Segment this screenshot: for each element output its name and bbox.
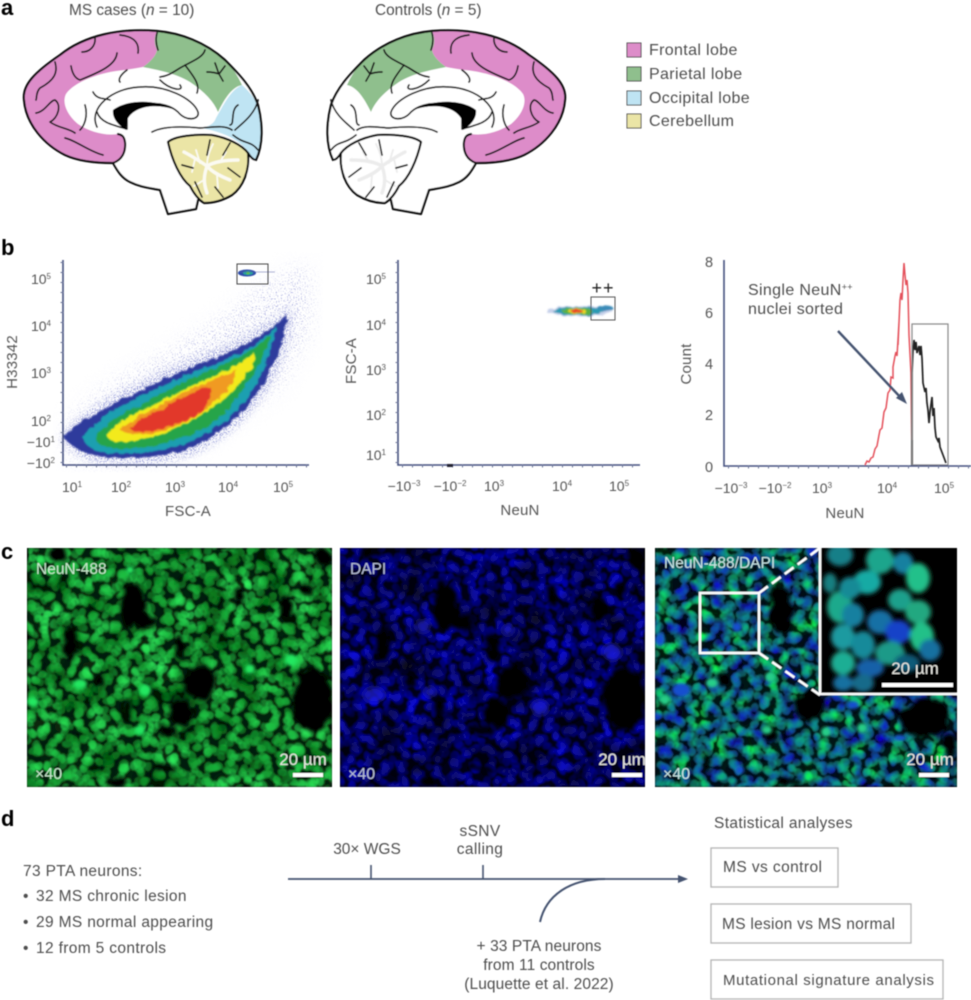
y tick labels: 4 xyxy=(705,357,713,373)
corpus callosum xyxy=(391,87,494,129)
image background xyxy=(27,548,332,787)
x tick labels: 10 xyxy=(812,480,828,496)
scale bar xyxy=(293,773,323,777)
y tick labels: 5 xyxy=(382,272,387,281)
zoom region box xyxy=(700,593,759,653)
sample list: • xyxy=(23,940,29,957)
x axis title: FSC-A xyxy=(165,503,211,520)
analysis box: mutational signature: Mutational signature analysis xyxy=(723,972,934,989)
annotation text: Single NeuN xyxy=(748,282,842,299)
y tick labels: 4 xyxy=(382,318,387,327)
analysis box: MS vs control xyxy=(711,848,838,887)
y tick labels: 10 xyxy=(366,362,382,378)
inset xyxy=(820,544,957,695)
x tick labels xyxy=(388,478,630,494)
brain silhouette xyxy=(328,30,565,214)
tick: calling xyxy=(482,865,484,879)
scale label: 20 µm xyxy=(906,750,954,769)
density: yellow xyxy=(107,353,255,442)
arrow to gate xyxy=(838,331,907,404)
sample list: • xyxy=(23,888,29,905)
green nuclei xyxy=(660,672,867,737)
brain diagram: MS cases xyxy=(24,30,262,214)
density: teal xyxy=(82,326,277,454)
image background xyxy=(340,548,645,787)
x tick labels xyxy=(715,480,955,496)
y tick labels: −10 xyxy=(27,434,51,450)
analysis box: MS vs control: MS vs control xyxy=(723,859,822,876)
y tick labels: 2 xyxy=(382,408,387,417)
red histogram xyxy=(865,263,912,465)
x tick labels: 10 xyxy=(609,478,625,494)
x tick labels: −10 xyxy=(434,478,457,494)
brain silhouette xyxy=(24,30,261,214)
heading: controls: Controls (n = 5) xyxy=(375,2,482,19)
x tick labels: 4 xyxy=(568,479,573,488)
dense scatter fringe xyxy=(60,305,292,464)
y tick labels: 6 xyxy=(705,306,713,322)
x tick labels: 1 xyxy=(78,480,83,489)
micrograph: NeuN-488 xyxy=(27,547,332,787)
scale label: 20 µm xyxy=(598,750,646,769)
x tick labels: 2 xyxy=(127,480,132,489)
y tick labels: 10 xyxy=(31,271,47,287)
y tick labels: 4 xyxy=(47,319,52,328)
cerebellum white matter xyxy=(351,144,405,193)
y axis title: FSC-A xyxy=(343,338,360,384)
gate box xyxy=(591,297,615,320)
y tick labels: 0 xyxy=(705,460,713,476)
sample list: 32 MS chronic lesion xyxy=(36,888,187,905)
panel label b: b xyxy=(1,235,14,260)
x tick labels: −10 xyxy=(388,478,411,494)
y tick labels: −10 xyxy=(27,455,51,471)
density: blue xyxy=(63,315,287,458)
legend item: parietal lobe: Parietal lobe xyxy=(649,66,742,83)
y tick labels xyxy=(27,271,56,471)
x tick labels xyxy=(62,479,294,495)
sulci xyxy=(36,33,258,197)
gate box xyxy=(912,324,948,465)
y tick labels: 10 xyxy=(31,413,47,429)
x tick labels: −10 xyxy=(715,480,738,496)
analysis box: mutational signature xyxy=(711,960,943,999)
inset scale label: 20 µm xyxy=(891,659,939,678)
x tick labels: −10 xyxy=(759,480,782,496)
bright nuclei xyxy=(364,620,621,715)
dark gaps xyxy=(359,547,645,787)
heading: statistical analyses: Statistical analyses xyxy=(714,815,853,832)
sample list xyxy=(23,863,213,957)
added neurons note: + 33 PTA neurons xyxy=(477,938,602,955)
magnification: ×40 xyxy=(348,766,375,783)
y tick labels: 2 xyxy=(51,456,56,465)
x tick labels: −2 xyxy=(457,479,467,488)
y tick labels: 8 xyxy=(705,255,713,271)
y axis title: H33342 xyxy=(4,335,21,389)
legend xyxy=(627,42,750,130)
x tick labels: 10 xyxy=(273,479,289,495)
panel label d: d xyxy=(1,806,14,831)
x tick labels: 5 xyxy=(950,481,955,490)
image label: DAPI xyxy=(350,561,386,578)
y tick labels: 10 xyxy=(366,447,382,463)
x tick labels: 3 xyxy=(828,481,833,490)
analysis box: lesion vs normal xyxy=(711,904,911,943)
scatter plot: H33342 vs FSC-A xyxy=(4,260,310,520)
histogram: count vs NeuN xyxy=(678,255,971,522)
tick: WGS xyxy=(370,865,372,879)
legend item: cerebellum: Cerebellum xyxy=(649,113,734,130)
annotation text: ++ xyxy=(842,282,853,292)
merging curve xyxy=(540,879,605,922)
sample list: 29 MS normal appearing xyxy=(36,914,213,931)
y tick labels: 1 xyxy=(51,435,56,444)
heading: MS cases: MS cases (n = 10) xyxy=(69,2,194,19)
inset frame xyxy=(820,548,957,694)
y tick labels xyxy=(366,271,387,463)
density: green xyxy=(95,335,270,449)
sulci xyxy=(331,33,553,197)
region: occipital lobe xyxy=(200,85,262,160)
y tick labels: 10 xyxy=(31,318,47,334)
y tick labels: 10 xyxy=(366,271,382,287)
cerebellum white matter xyxy=(184,144,238,193)
workflow timeline arrow xyxy=(288,865,688,922)
micrograph: merged NeuN-488/DAPI xyxy=(655,544,957,787)
y tick labels: 3 xyxy=(382,363,387,372)
x tick labels: 10 xyxy=(111,479,127,495)
x tick labels: 10 xyxy=(934,480,950,496)
y tick labels xyxy=(705,255,713,476)
scale bar xyxy=(919,773,949,777)
corpus callosum xyxy=(95,87,198,129)
analysis box: lesion vs normal: MS lesion vs MS normal xyxy=(722,916,895,933)
y tick labels: 10 xyxy=(31,365,47,381)
panel label c: c xyxy=(1,539,13,564)
annotation text: nuclei sorted xyxy=(748,301,843,318)
y tick labels: 5 xyxy=(47,272,52,281)
image label: NeuN-488/DAPI xyxy=(664,555,775,572)
y tick labels: 10 xyxy=(366,407,382,423)
sample list: • xyxy=(23,914,29,931)
y tick labels: 1 xyxy=(382,448,387,457)
y tick labels: 3 xyxy=(47,366,52,375)
cells xyxy=(655,548,957,787)
x tick labels: 4 xyxy=(893,481,898,490)
density: red xyxy=(130,387,211,432)
zoom guide lines xyxy=(759,548,820,695)
y tick labels: 2 xyxy=(47,414,52,423)
region: frontal lobe xyxy=(432,30,565,163)
scale label: 20 µm xyxy=(279,750,327,769)
x tick labels: 4 xyxy=(234,480,239,489)
inset cells xyxy=(823,544,941,692)
x tick labels: 3 xyxy=(181,480,186,489)
blue nuclei xyxy=(655,622,906,774)
step label: sSNV calling: calling xyxy=(457,841,503,858)
magnification: ×40 xyxy=(35,766,62,783)
x axis title: NeuN xyxy=(825,505,865,522)
x tick labels: −3 xyxy=(411,479,421,488)
x tick labels: 5 xyxy=(289,480,294,489)
micrograph: DAPI xyxy=(340,547,646,787)
annotation text xyxy=(748,282,853,318)
x tick labels: 10 xyxy=(877,480,893,496)
image label: NeuN-488 xyxy=(36,561,107,578)
x tick labels: 10 xyxy=(484,478,500,494)
step label: sSNV calling: sSNV xyxy=(459,823,501,840)
bright cells xyxy=(27,566,297,735)
region: parietal lobe xyxy=(143,31,242,112)
black histogram xyxy=(912,340,946,465)
gated population xyxy=(238,270,275,276)
outline xyxy=(24,30,262,214)
x tick labels: 3 xyxy=(500,479,505,488)
y axis title: Count xyxy=(678,343,695,385)
x tick labels: 10 xyxy=(552,478,568,494)
y tick labels: 10 xyxy=(366,317,382,333)
sample list: 73 PTA neurons: xyxy=(23,863,143,880)
ventricle xyxy=(414,102,476,130)
outline xyxy=(327,30,565,214)
axes xyxy=(724,260,971,466)
magnification: ×40 xyxy=(663,766,690,783)
dark gaps xyxy=(701,586,957,787)
x tick labels: −3 xyxy=(738,481,748,490)
x tick labels: 10 xyxy=(62,479,78,495)
legend item: frontal lobe: Frontal lobe xyxy=(649,42,738,59)
region: cerebellum xyxy=(168,135,248,203)
axes xyxy=(63,260,309,465)
brain diagram: controls xyxy=(327,30,565,214)
region: frontal lobe xyxy=(24,30,157,163)
dark gaps xyxy=(46,547,332,787)
ventricle xyxy=(113,102,175,130)
added neurons note: from 11 controls xyxy=(483,957,595,974)
region: parietal lobe xyxy=(347,31,446,112)
sample list: 12 from 5 controls xyxy=(36,940,166,957)
inset scale bar xyxy=(882,683,953,687)
cells xyxy=(340,547,645,787)
image background xyxy=(655,548,957,787)
scatter plot: FSC-A vs NeuN xyxy=(343,260,640,519)
step label: WGS: 30× WGS xyxy=(333,841,401,858)
y tick labels: 2 xyxy=(705,408,713,424)
sparse scatter points xyxy=(66,262,310,462)
legend item: occipital lobe: Occipital lobe xyxy=(649,90,750,107)
gate label: ++ xyxy=(591,278,615,298)
x tick labels: 5 xyxy=(625,479,630,488)
scale bar xyxy=(612,773,642,777)
added neurons note: (Luquette et al. 2022) xyxy=(464,976,614,993)
x tick labels: −2 xyxy=(782,481,792,490)
x axis title: NeuN xyxy=(500,502,540,519)
gate box xyxy=(237,264,268,284)
density cluster xyxy=(546,305,613,316)
cells xyxy=(27,547,332,787)
x tick labels: 10 xyxy=(218,479,234,495)
density: orange xyxy=(120,370,237,434)
axes xyxy=(398,260,640,465)
x tick labels: 10 xyxy=(165,479,181,495)
